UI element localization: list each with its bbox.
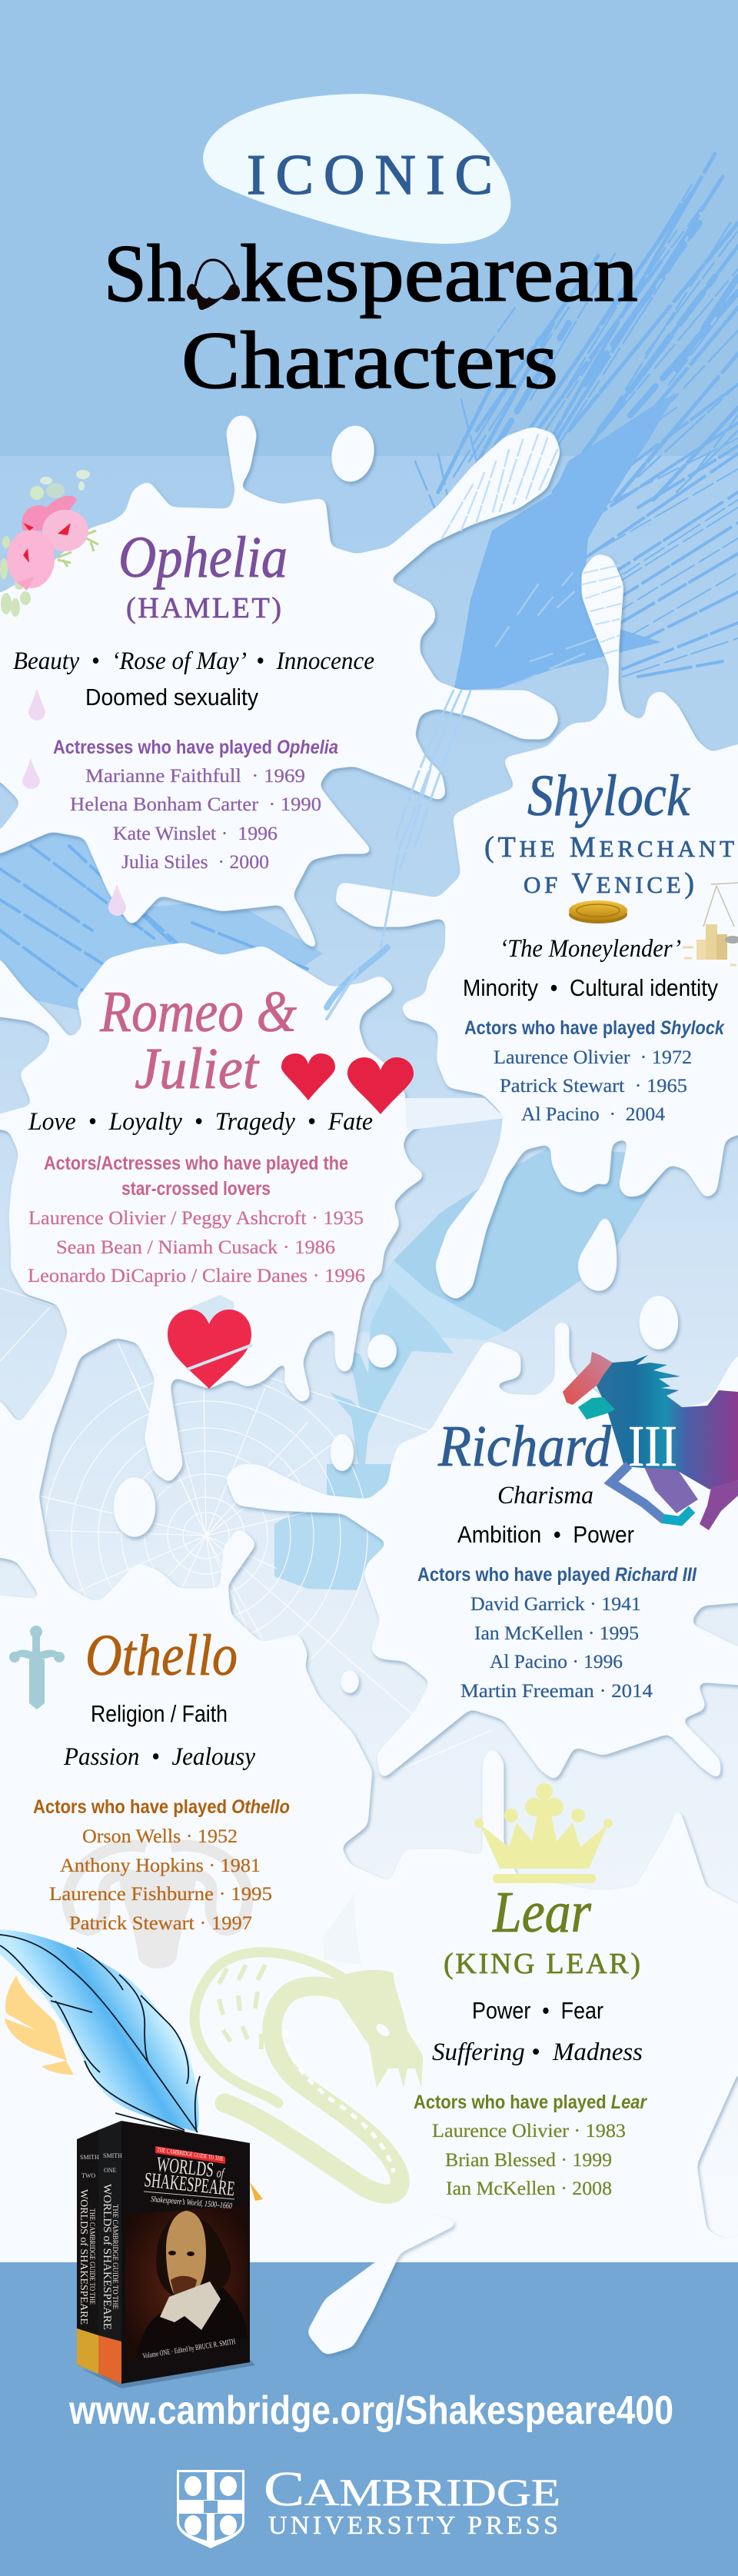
panel: Shylock: [463, 764, 738, 1125]
actor list: [460, 1594, 653, 1702]
heading: Romeo & Juliet: Romeo &: [99, 980, 297, 1044]
traits line 1: Religion / Faith: [91, 1700, 228, 1727]
heading: Ophelia: Ophelia: [118, 525, 288, 590]
back spine subtitle: THE CAMBRIDGE GUIDE TO THE: [88, 2208, 96, 2305]
actor list: Kate Winslet · 1996: [113, 824, 278, 844]
actor list: Martin Freeman · 2014: [460, 1681, 653, 1702]
actor list: Laurence Olivier · 1972: [494, 1047, 692, 1068]
actor list: Patrick Stewart · 1997: [69, 1913, 252, 1934]
actors heading: [44, 1153, 348, 1200]
illustration: ram head: [68, 1845, 248, 1969]
splat: Shylock: [335, 554, 738, 1300]
lower pale blue splash: [360, 1260, 505, 1340]
cover title: SHAKESPEARE: [143, 2168, 236, 2200]
brush: light streaks in dark mass: [496, 554, 615, 684]
actor list: [49, 1826, 272, 1934]
portrait face: [166, 2211, 206, 2303]
title: Shakespearean: [104, 228, 638, 318]
icon: gold coin: [569, 900, 627, 924]
actors heading: Actors/Actresses who have played the: [44, 1153, 348, 1174]
snake neck and body: [224, 1986, 400, 2194]
translucent strip between Romeo and Shylock: [405, 1098, 505, 1130]
front spine editor: [103, 2152, 122, 2174]
back spine editor: SMITH: [80, 2154, 99, 2161]
traits line 1: Power • Fear: [472, 1997, 603, 2024]
splat drops: [327, 421, 379, 486]
actor list: [432, 2121, 626, 2199]
panel: Ophelia: [13, 525, 374, 916]
brush stems over splats: [327, 434, 623, 1019]
heading: Romeo & Juliet: Juliet: [135, 1037, 260, 1101]
traits line 1: Beauty • ‘Rose of May’ • Innocence: [13, 647, 374, 675]
subheading: The Merchant of Venice: (THE MERCHANT: [484, 831, 734, 864]
portrait collar: [160, 2281, 221, 2330]
logo: Cambridge wordmark: CAMBRIDGE: [264, 2461, 560, 2516]
snake head: [338, 1970, 423, 2088]
logo: Cambridge wordmark: UNIVERSITY PRESS: [268, 2511, 558, 2540]
brush: dark blue mass: [454, 392, 676, 691]
actor list: Patrick Stewart · 1965: [500, 1076, 687, 1097]
feather ink lines: [0, 1935, 200, 2132]
front spine editor: ONE: [104, 2167, 117, 2174]
actor list: Sean Bean / Niamh Cusack · 1986: [56, 1237, 335, 1258]
book set: [77, 2121, 255, 2388]
white paint splats: [0, 416, 738, 2280]
title blob: [203, 94, 510, 244]
cover red tag: [155, 2145, 225, 2164]
traits line 1: ‘The Moneylender’: [500, 935, 681, 963]
panel: Othello: [9, 1623, 290, 1934]
icon: lilac drop 2: [22, 758, 40, 789]
cover title: WORLDS of: [155, 2152, 227, 2182]
pale pocket in Lear splat: [323, 1893, 361, 1965]
yellow flame behind feather: [5, 1975, 74, 2075]
icon: Shakespeare head in title: [187, 260, 240, 310]
illustration: feather: [0, 1929, 263, 2201]
cover red tag: THE CAMBRIDGE GUIDE TO THE: [157, 2145, 224, 2162]
blue vessel upper bowl: [327, 1464, 391, 1499]
back spine editor: [80, 2154, 99, 2179]
subheading: King Lear: (KING LEAR): [444, 1948, 640, 1980]
heading: Richard III: III: [628, 1414, 677, 1479]
brush strokes: upper right fan: [415, 154, 738, 677]
actor list: Leonardo DiCaprio / Claire Danes · 1996: [28, 1266, 365, 1286]
blue vessel lower bowl: [274, 1507, 388, 1590]
actor list: [70, 766, 321, 873]
title: Shakespearean: kespearean: [240, 228, 638, 318]
traits line 2: Passion • Jealousy: [63, 1743, 255, 1771]
snake outer coil: [194, 1952, 346, 2103]
heading: Romeo & Juliet: [99, 980, 297, 1101]
actor list: [28, 1208, 365, 1286]
panel: Lear: [414, 1780, 647, 2199]
cover portrait background: [125, 2205, 248, 2361]
actor list: Laurence Olivier / Peggy Ashcroft · 1935: [28, 1208, 364, 1229]
actors heading: Actors who have played Lear: [414, 2092, 647, 2113]
front spine editor: SMITH: [103, 2152, 122, 2159]
actor list: Brian Blessed · 1999: [445, 2150, 612, 2171]
traits line 2: Suffering • Madness: [432, 2039, 643, 2066]
back spine editor: TWO: [81, 2172, 95, 2179]
horse jaw: [578, 1397, 615, 1419]
traits line 2: Ambition • Power: [457, 1521, 634, 1548]
front cover: [121, 2121, 250, 2384]
book shadow: [81, 2359, 255, 2388]
front volume colour foot: [98, 2335, 121, 2384]
traits line 2: Doomed sexuality: [85, 684, 258, 711]
bottom band: [0, 2262, 738, 2576]
splat: Richard III: [225, 1323, 738, 1781]
actor list: Orson Wells · 1952: [82, 1826, 238, 1847]
title: Shakespearean: Sh: [104, 228, 185, 318]
icon: crown: [474, 1780, 613, 1883]
traits line: Love • Loyalty • Tragedy • Fate: [28, 1108, 373, 1136]
blue vessel stem: [330, 1285, 454, 1465]
actor list: Helena Bonham Carter · 1990: [70, 794, 321, 815]
orange sliver: [250, 2182, 263, 2201]
heading: Shylock: Shylock: [527, 764, 690, 828]
traits line 1: Charisma: [497, 1482, 593, 1509]
heading: Othello: Othello: [85, 1623, 238, 1688]
panel: Romeo and Juliet: [28, 980, 414, 1389]
front spine subtitle: THE CAMBRIDGE GUIDE TO THE: [111, 2205, 119, 2309]
actors heading: Actresses who have played Ophelia: [53, 737, 338, 758]
portrait eyes: [168, 2251, 194, 2256]
subheading: The Merchant of Venice: [484, 831, 734, 900]
heading: Lear: Lear: [492, 1880, 591, 1945]
horse rear leg: [700, 1480, 738, 1530]
splat: Romeo and Juliet: [0, 943, 430, 1607]
horse front legs: [611, 1465, 692, 1521]
front volume spine: [98, 2121, 121, 2384]
snake belly marks: [286, 2030, 394, 2172]
portrait body: [137, 2288, 248, 2358]
portrait hair: [156, 2215, 231, 2295]
actor list: [494, 1047, 692, 1125]
illustration: flowers: [0, 470, 98, 617]
logo: Cambridge wordmark: [264, 2461, 560, 2540]
illustration: horse: [563, 1352, 738, 1530]
subheading: The Merchant of Venice: OF VENICE): [524, 867, 694, 900]
actors heading: Actors who have played Richard III: [417, 1564, 697, 1586]
icon: heart 1: [281, 1053, 335, 1100]
snake eye: [374, 2022, 392, 2039]
horse head: [563, 1352, 613, 1405]
cover title: [143, 2152, 236, 2211]
title: Characters: Characters: [181, 315, 558, 405]
splat: Ophelia: [0, 416, 560, 953]
actor list: Ian McKellen · 1995: [474, 1623, 639, 1644]
icon: heart 2: [347, 1057, 414, 1114]
icon: lilac drop 1: [28, 688, 45, 721]
icon: scales and coin stacks: [683, 883, 738, 965]
back volume spine: [77, 2130, 98, 2374]
actor list: Laurence Fishburne · 1995: [49, 1884, 272, 1905]
portrait mouth and beard: [171, 2276, 197, 2300]
title: ICONIC: ICONIC: [247, 144, 493, 207]
back volume colour foot: [77, 2328, 98, 2374]
actor list: David Garrick · 1941: [470, 1594, 641, 1615]
big white drop: [307, 2215, 461, 2355]
actor list: Al Pacino · 1996: [490, 1652, 623, 1672]
lower left brush streaks: [0, 846, 308, 992]
blue splash fan: [394, 1147, 664, 1332]
snake scales: [219, 1965, 265, 2049]
cover title: Shakespeare’s World, 1500–1660: [151, 2195, 233, 2211]
cover editor line: Volume ONE · Edited by BRUCE R. SMITH: [142, 2338, 236, 2361]
front spine title: WORLDS of SHAKESPEARE: [101, 2184, 113, 2330]
feather vane: [0, 1929, 199, 2132]
actor list: Laurence Olivier · 1983: [432, 2121, 626, 2142]
panel: Richard III: [417, 1414, 697, 1702]
heading: Richard III: Richard: [437, 1414, 612, 1479]
background: gradient wash: [0, 456, 738, 2278]
actor list: Julia Stiles · 2000: [121, 852, 269, 873]
actors heading: star-crossed lovers: [121, 1178, 271, 1200]
horse body: [592, 1355, 738, 1489]
traits line 2: Minority • Cultural identity: [463, 974, 718, 1001]
logo: Cambridge crest: [177, 2470, 244, 2548]
subheading: Hamlet: (HAMLET): [126, 592, 281, 624]
actor list: Marianne Faithfull · 1969: [85, 766, 305, 787]
actor list: Anthony Hopkins · 1981: [60, 1855, 261, 1876]
actors heading: Actors who have played Shylock: [464, 1017, 725, 1039]
back spine title: WORLDS of SHAKESPEARE: [78, 2189, 89, 2325]
actor list: Al Pacino · 2004: [521, 1104, 666, 1125]
icon: lilac drop 3: [108, 884, 126, 916]
lower left brush patch: [0, 830, 323, 1015]
icon: broken heart: [168, 1310, 252, 1389]
illustration: snake: [194, 1952, 423, 2194]
spider web: [0, 1288, 492, 1776]
splat: Othello, Lear and bottom area: [0, 1527, 738, 2280]
pale notch above heart: [187, 1295, 234, 1324]
icon: dagger: [9, 1626, 65, 1709]
actors heading: Actors who have played Othello: [33, 1796, 290, 1818]
actor list: Ian McKellen · 2008: [446, 2178, 612, 2199]
background: top sky band: [0, 0, 738, 457]
